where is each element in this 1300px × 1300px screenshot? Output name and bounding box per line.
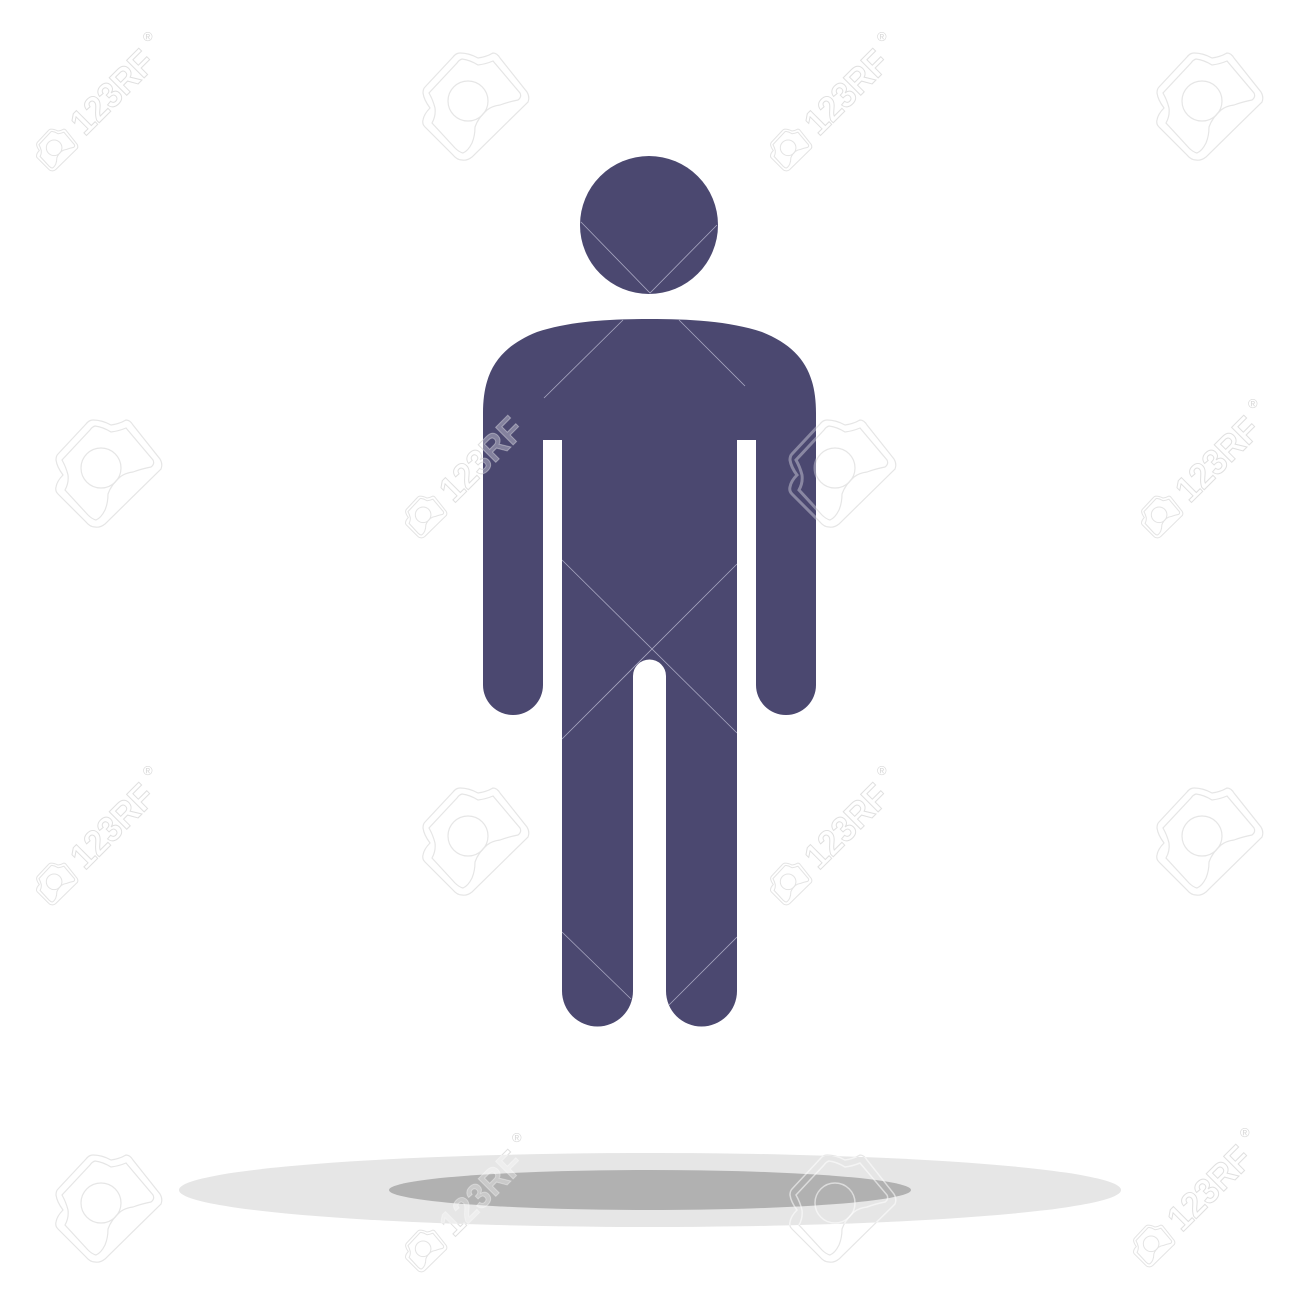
watermark logo third row left: ® <box>143 763 153 778</box>
head <box>580 156 718 294</box>
watermark over figure: 123RF <box>431 409 532 510</box>
watermark logo second row left <box>405 409 532 538</box>
watermark logo bottom right: 123RF <box>1159 1138 1260 1239</box>
watermark over figure <box>483 414 816 520</box>
watermark logo top centre: 123RF <box>796 42 897 143</box>
watermark over shadow <box>440 1155 896 1225</box>
person figure <box>483 156 816 1026</box>
watermark logo bottom centre: ® <box>512 1130 522 1145</box>
watermark logo bottom right <box>1133 1125 1260 1267</box>
watermark logo top left <box>36 29 163 171</box>
watermark logo third row centre: 123RF <box>796 776 897 877</box>
watermark logo top left: ® <box>143 29 153 44</box>
watermark logo top centre: ® <box>877 29 887 44</box>
watermark over shadow: 123RF <box>431 1143 532 1244</box>
ground shadow: inner ellipse <box>389 1170 911 1210</box>
watermark logo bottom centre <box>405 1130 532 1272</box>
body with arms and legs <box>483 319 816 1026</box>
watermark logo second row right <box>1141 396 1268 538</box>
watermark logo third row left <box>36 763 163 905</box>
watermark diagonal lines on figure <box>544 222 745 1005</box>
watermark logo top left: 123RF <box>62 42 163 143</box>
watermark logo third row centre <box>770 763 897 905</box>
watermark logo second row left: 123RF <box>431 409 532 510</box>
watermark logo third row left: 123RF <box>62 776 163 877</box>
watermark logo bottom right: ® <box>1240 1125 1250 1140</box>
watermark logo second row right: 123RF <box>1167 409 1268 510</box>
watermark logo bottom centre: 123RF <box>431 1143 532 1244</box>
watermark logo second row right: ® <box>1248 396 1258 411</box>
watermark logo top centre <box>770 29 897 171</box>
watermark logo third row centre: ® <box>877 763 887 778</box>
ground shadow: outer ellipse <box>179 1153 1121 1227</box>
